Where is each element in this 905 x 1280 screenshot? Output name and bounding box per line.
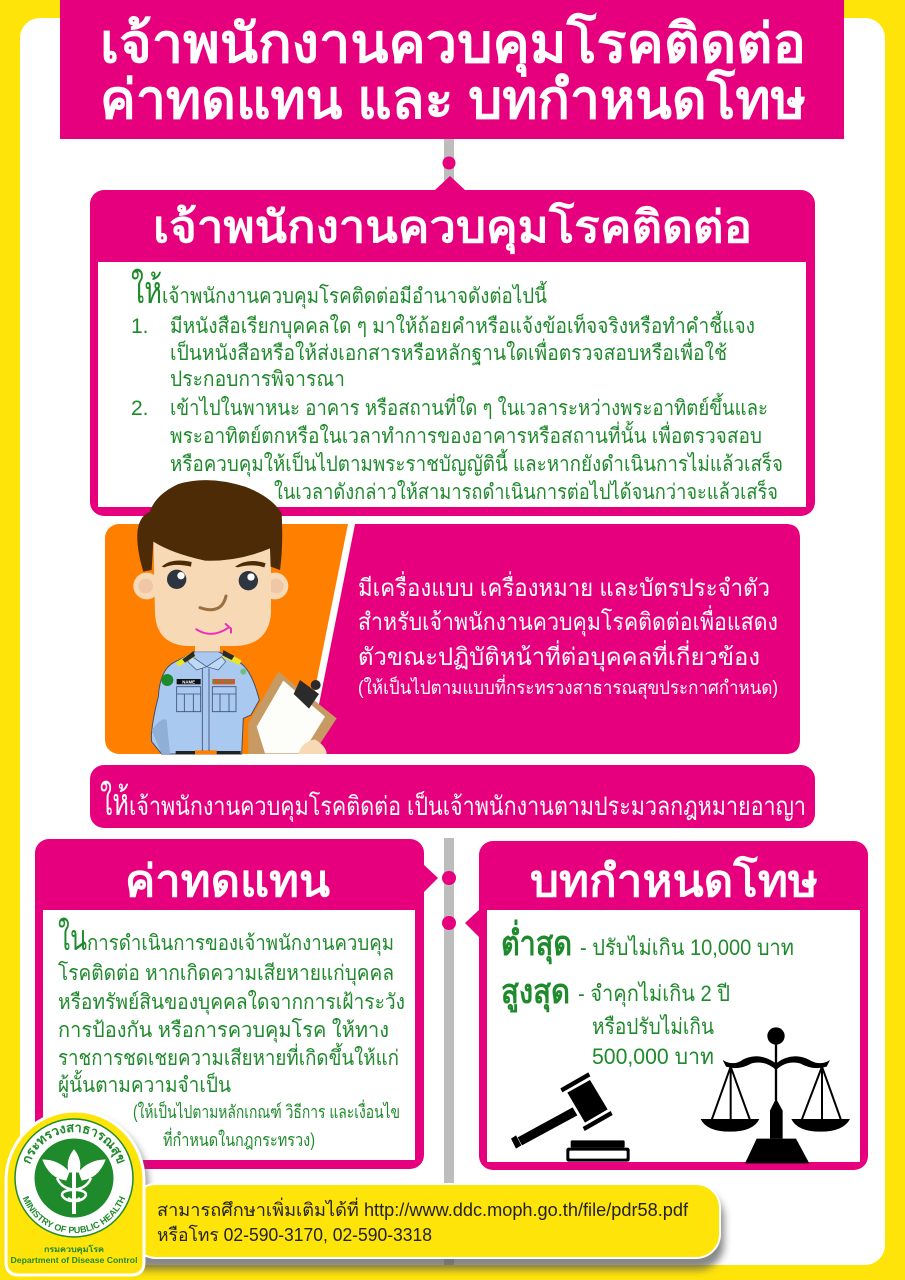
head: [133, 480, 288, 652]
footer bar: contact: หรือโทร 02-590-3170, 02-590-3318: [157, 1224, 432, 1245]
heading: compensation: ค่าทดแทน: [125, 857, 330, 906]
text block: officer powers: เข้าไปในพาหนะ อาคาร หรือสถานที่ใด ๆ ในเวลาระหว่างพระอาทิตย์ขึ้นและ: [170, 393, 768, 420]
footer bar: contact: สามารถศึกษาเพิ่มเติมได้ที่ http://www.ddc.moph.go.th/file/pdr58.pdf: [157, 1197, 689, 1220]
text block: penalties: ต่ำสุด: [501, 919, 572, 965]
text block: compensation: [58, 917, 405, 1150]
text block: compensation: หรือทรัพย์สินของบุคคลใดจากการเฝ้าระวัง: [58, 990, 405, 1015]
text block: compensation: โรคติดต่อ หากเกิดความเสียหายแก่บุคคล: [58, 961, 394, 986]
panel: uniform and ID card: [105, 524, 800, 754]
text block: officer powers: ในเวลาดังกล่าวให้สามารถดำเนินการต่อไปได้จนกว่าจะแล้วเสร็จ: [274, 478, 778, 504]
text block: penalties: - จำคุกไม่เกิน 2 ปี: [578, 981, 730, 1007]
logo: ministry of public health: [4, 1112, 146, 1276]
text block: penalties: [501, 919, 794, 1069]
text block: officer powers: เจ้าพนักงานควบคุมโรคติดต่อมีอำนาจดังต่อไปนี้: [162, 281, 547, 309]
text block: officer powers: ประกอบการพิจารณา: [170, 368, 345, 391]
callout: officers under criminal procedure: [90, 765, 815, 828]
text block: compensation: (ให้เป็นไปตามหลักเกณฑ์ วิธีการ และเงื่อนไข: [133, 1099, 400, 1122]
panel: penalties: [465, 841, 868, 1170]
connector dot: [442, 156, 456, 170]
section heading: officer: เจ้าพนักงานควบคุมโรคติดต่อ: [153, 200, 752, 255]
text block: officer powers: ให้: [131, 269, 162, 312]
text block: officer powers: หรือควบคุมให้เป็นไปตามพระราชบัญญัตินี้ และหากยังดำเนินการไม่แล้วเสร็จ: [170, 449, 783, 477]
text block: uniform: (ให้เป็นไปตามแบบที่กระทรวงสาธารณสุขประกาศกำหนด): [358, 674, 778, 700]
logo: ministry of public health: กระทรวงสาธารณสุข: [24, 1124, 125, 1164]
text block: officer powers: มีหนังสือเรียกบุคคลใด ๆ มาให้ถ้อยคำหรือแจ้งข้อเท็จจริงหรือทำคำชี้แจง: [170, 311, 755, 339]
agency name: Department of Disease Control: [10, 1256, 138, 1265]
text block: compensation: การป้องกัน หรือการควบคุมโรค ให้ทาง: [58, 1018, 389, 1043]
text block: officer powers: พระอาทิตย์ตกหรือในเวลาทำการของอาคารหรือสถานที่นั้น เพื่อตรวจสอบ: [170, 421, 762, 448]
text block: officer powers: 1.: [131, 315, 149, 338]
text block: uniform: ตัวขณะปฏิบัติหน้าที่ต่อบุคคลที่เกี่ยวข้อง: [358, 640, 760, 672]
text block: compensation: ที่กำหนดในกฎกระทรวง): [163, 1127, 315, 1150]
text block: uniform: สำหรับเจ้าพนักงานควบคุมโรคติดต่อเพื่อแสดง: [358, 605, 778, 637]
icon: officer character: [133, 480, 337, 754]
text block: officer powers: 2.: [131, 397, 149, 420]
footer bar: contact: [132, 1184, 720, 1258]
text block: officer powers: เป็นหนังสือหรือให้ส่งเอกสารหรือหลักฐานใดเพื่อตรวจสอบหรือเพื่อใช้: [170, 338, 727, 365]
footer and logo shadow: [10, 1117, 724, 1270]
clipboard: [248, 672, 337, 754]
icon: gavel: [511, 1072, 630, 1162]
text block: compensation: การดำเนินการของเจ้าพนักงานควบคุม: [87, 932, 394, 956]
agency name: [10, 1244, 138, 1265]
text block: penalties: หรือปรับไม่เกิน: [592, 1014, 714, 1039]
text block: uniform: มีเครื่องแบบ เครื่องหมาย และบัตรประจำตัว: [358, 571, 770, 602]
agency name: กรมควบคุมโรค: [44, 1244, 104, 1255]
text block: compensation: ใน: [58, 917, 87, 958]
heading: penalties: บทกำหนดโทษ: [530, 854, 818, 906]
text block: compensation: ผู้นั้นตามความจำเป็น: [58, 1070, 231, 1098]
connector dots: [442, 871, 456, 930]
emblem: caduceus: [43, 1150, 105, 1214]
uniform shirt: NAME: [182, 679, 195, 684]
text block: penalties: 500,000 บาท: [592, 1044, 714, 1069]
text block: compensation: ราชการชดเชยความเสียหายที่เกิดขึ้นให้แก่: [58, 1043, 399, 1070]
text block: penalties: สูงสุด: [501, 973, 570, 1013]
text block: officer powers: [131, 269, 783, 504]
text block: penalties: - ปรับไม่เกิน 10,000 บาท: [580, 935, 794, 960]
icon: scales of justice: [701, 1027, 850, 1163]
title banner: ค่าทดแทน และ บทกำหนดโทษ: [100, 68, 806, 130]
panel: officer powers: [90, 176, 815, 516]
text block: uniform: [358, 571, 778, 700]
uniform shirt: [151, 650, 259, 754]
callout: officers under criminal procedure: ให้: [100, 781, 129, 824]
logo: ministry of public health: MINISTRY OF PUBLIC HEALTH: [22, 1196, 126, 1234]
title banner: [60, 0, 844, 139]
title banner: เจ้าพนักงานควบคุมโรคติดต่อ: [100, 12, 806, 78]
panel: compensation: [35, 839, 438, 1169]
